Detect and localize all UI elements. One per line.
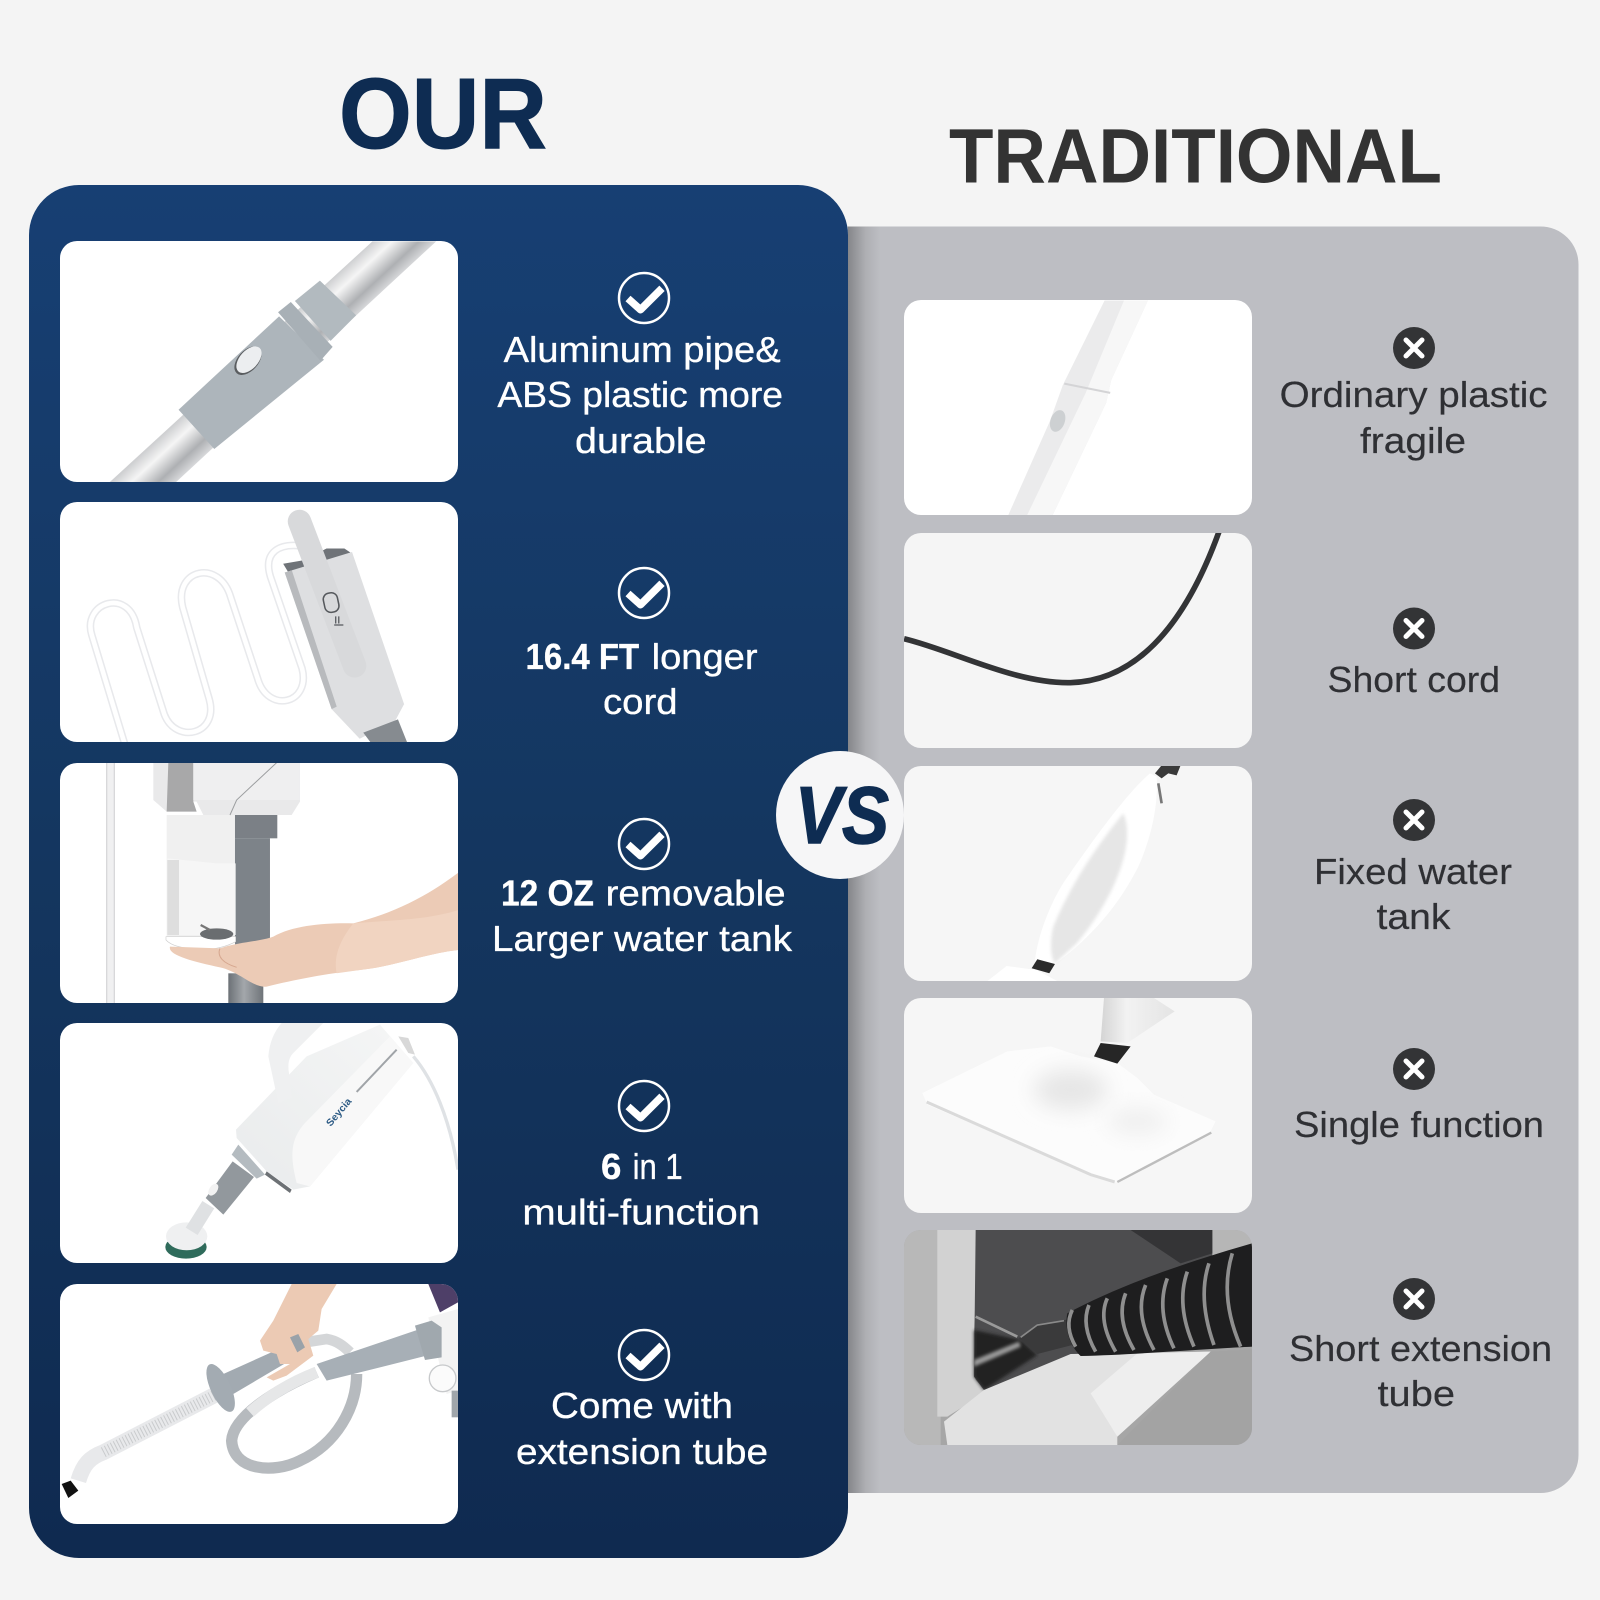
- row 1 text: ordinary plastic fragile: fragile: [1360, 420, 1466, 461]
- icon: cross: [1393, 1278, 1435, 1320]
- heading: TRADITIONAL: TRADITIONAL: [949, 114, 1442, 200]
- row 2 text: short cord: Short cord: [1328, 659, 1500, 700]
- photo: aluminum pipe: [60, 241, 458, 482]
- row 1 text: aluminum pipe: ABS plastic more: [497, 374, 783, 415]
- row 5 text: come with extension tube: extension tube: [516, 1431, 768, 1472]
- row 4 text: 6 in 1 multi-function: [522, 1081, 760, 1232]
- badge: VS: [776, 751, 904, 879]
- row 4 text: 6 in 1 multi-function: in 1: [633, 1146, 683, 1187]
- row 5 text: short extension tube: [1289, 1278, 1552, 1414]
- panel: traditional: [800, 226, 1579, 1493]
- row 5 text: come with extension tube: Come with: [551, 1385, 733, 1426]
- row 2 text: 16.4 FT longer cord: cord: [603, 681, 678, 722]
- heading: OUR: OUR: [339, 58, 547, 170]
- row 3 text: 12 OZ removable larger water tank: removable: [606, 873, 786, 914]
- row 1 text: aluminum pipe: [497, 273, 783, 461]
- row 2 text: 16.4 FT longer cord: [526, 568, 758, 722]
- photo: short black cord: [904, 531, 1252, 748]
- icon: cross: [1393, 608, 1435, 650]
- icon: check: [619, 1330, 669, 1380]
- row 4 text: single function: [1294, 1048, 1544, 1145]
- row 3 text: 12 OZ removable larger water tank: 12 OZ: [501, 873, 594, 914]
- row 3 text: 12 OZ removable larger water tank: Larger water tank: [492, 918, 793, 959]
- icon: check: [619, 273, 669, 323]
- icon: cross: [1393, 1048, 1435, 1090]
- icon: check: [619, 819, 669, 869]
- photo: fixed water tank: [904, 765, 1252, 982]
- row 2 text: 16.4 FT longer cord: longer: [652, 636, 758, 677]
- icon: cross: [1393, 327, 1435, 369]
- photo: six in one handheld unit: [60, 1023, 458, 1263]
- photo: long cord and handle: [60, 502, 458, 745]
- row 5 text: short extension tube: Short extension: [1289, 1328, 1552, 1369]
- row 1 text: aluminum pipe: durable: [575, 420, 707, 461]
- row 3 text: 12 OZ removable larger water tank: [492, 819, 793, 959]
- badge: VS: VS: [795, 771, 889, 861]
- row 5 text: short extension tube: tube: [1378, 1373, 1455, 1414]
- photo: short extension tube: [904, 1230, 1252, 1445]
- photo: extension tube: [60, 1284, 458, 1524]
- row 3 text: fixed water tank: Fixed water: [1314, 851, 1512, 892]
- icon: check: [619, 568, 669, 618]
- photo: six in one handheld unit: Seycia: [325, 1096, 355, 1129]
- row 4 text: 6 in 1 multi-function: multi-function: [522, 1192, 760, 1232]
- row 3 text: fixed water tank: [1314, 799, 1512, 937]
- row 4 text: 6 in 1 multi-function: 6: [601, 1146, 621, 1187]
- row 2 text: 16.4 FT longer cord: 16.4 FT: [526, 636, 639, 677]
- photo: ordinary plastic pole: [904, 300, 1252, 515]
- row 3 text: fixed water tank: tank: [1376, 896, 1452, 937]
- panel: our: [29, 185, 848, 1558]
- icon: cross: [1393, 799, 1435, 841]
- row 5 text: come with extension tube: [516, 1330, 768, 1472]
- photo: mop head single function: [904, 998, 1252, 1213]
- row 4 text: single function: Single function: [1294, 1104, 1544, 1145]
- row 1 text: ordinary plastic fragile: [1280, 327, 1548, 461]
- row 2 text: short cord: [1328, 608, 1500, 700]
- row 1 text: aluminum pipe: Aluminum pipe&: [504, 329, 781, 370]
- photo: removable water tank: [60, 760, 458, 1005]
- icon: check: [619, 1081, 669, 1131]
- row 1 text: ordinary plastic fragile: Ordinary plastic: [1280, 374, 1548, 415]
